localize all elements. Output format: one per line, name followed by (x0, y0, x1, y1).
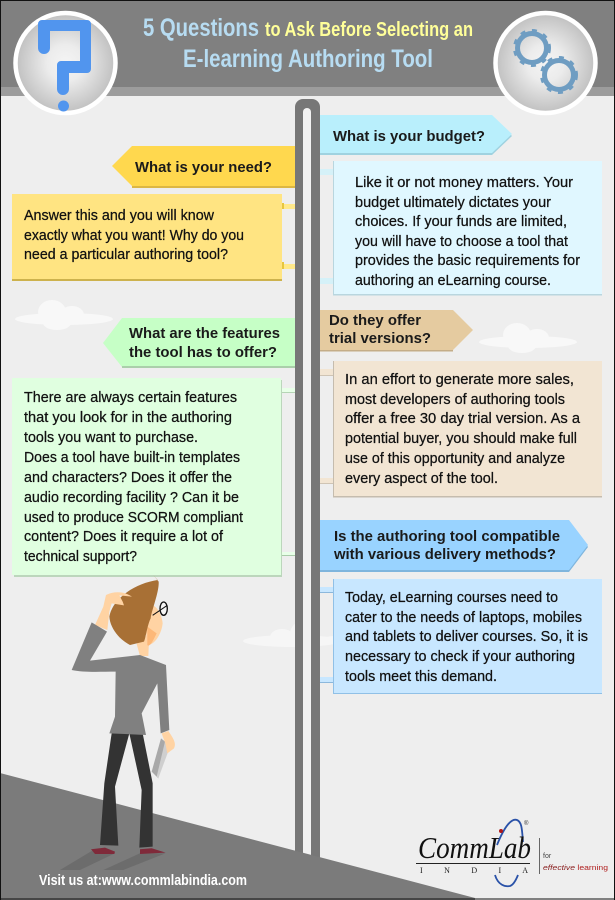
text box: trial versions: potential buyer, you should make full (345, 431, 577, 447)
text box: features: Does a tool have built-in templates (24, 450, 240, 466)
panel: features (12, 318, 295, 577)
logo: CommLab India: I N D I A (420, 866, 528, 875)
heading: need (112, 146, 295, 188)
connectors (282, 388, 295, 556)
connectors (320, 169, 334, 284)
heading: need: What is your need? (135, 160, 272, 176)
text box: trial versions: most developers of authoring tools (345, 392, 565, 408)
heading: delivery methods (320, 520, 588, 572)
text box: trial versions: use of this opportunity and analyze (345, 451, 565, 467)
logo: CommLab India (416, 820, 608, 886)
text box: features: tools you want to purchase. (24, 430, 198, 446)
text box: delivery methods: tools meet this demand. (345, 669, 497, 685)
heading: budget (320, 115, 512, 155)
website url: Visit us at:www.commlabindia.com (39, 872, 247, 889)
text box: delivery methods (333, 579, 602, 694)
text box: need: exactly what you want! Why do you (24, 228, 244, 244)
text box: budget (333, 161, 602, 296)
pole (295, 99, 320, 865)
text box: delivery methods: Today, eLearning courses need to (345, 590, 558, 606)
heading: features: the tool has to offer? (129, 345, 277, 361)
logo: CommLab India: effective learning (543, 863, 608, 872)
text box: need: need a particular authoring tool? (24, 247, 228, 263)
text box: features: used to produce SCORM compliant (24, 510, 243, 526)
ground (0, 773, 475, 900)
text box: features: There are always certain features (24, 390, 237, 406)
logo: CommLab India: ® (524, 820, 529, 827)
icon: gears (496, 13, 596, 113)
text box: delivery methods: necessary to check if your authoring (345, 649, 575, 665)
text box: trial versions: offer a free 30 day trial version. As a (345, 411, 581, 427)
cloud lower (243, 621, 347, 647)
panel: delivery methods (320, 520, 602, 694)
text box: trial versions (333, 361, 602, 498)
panel: trial versions (320, 310, 602, 498)
text box: features: content? Does it require a lot of (24, 529, 224, 545)
text box: features: that you look for in the authoring (24, 410, 232, 426)
text box: budget: Like it or not money matters. Your (355, 175, 573, 191)
cloud left (15, 300, 113, 330)
heading: trial versions: trial versions? (329, 331, 431, 347)
title: 5 Questions (143, 14, 259, 42)
icon: question mark (16, 13, 116, 113)
text box: features: technical support? (24, 549, 137, 565)
heading: features: What are the features (129, 326, 280, 342)
heading: delivery methods: Is the authoring tool compatible (334, 529, 560, 545)
connectors (320, 587, 333, 683)
heading: trial versions (320, 310, 473, 352)
heading: trial versions: Do they offer (329, 313, 421, 329)
text box: delivery methods: and tablets to deliver courses. So, it is (345, 629, 588, 645)
panel: budget (320, 115, 602, 296)
connectors (282, 203, 295, 269)
text box: features (12, 378, 282, 577)
logo: CommLab India: for (543, 853, 552, 860)
heading: budget: What is your budget? (333, 129, 485, 145)
text box: delivery methods: cater to the needs of laptops, mobiles (345, 610, 582, 626)
header band (0, 0, 615, 96)
heading: features (103, 318, 295, 368)
title: E-learning Authoring Tool (183, 45, 433, 73)
connectors (320, 369, 333, 484)
logo: CommLab India: CommLab (418, 830, 531, 865)
text box: budget: you will have to choose a tool that (355, 234, 568, 250)
cloud right (479, 323, 577, 353)
text box: budget: authoring an eLearning course. (355, 273, 551, 289)
heading: delivery methods: with various delivery methods? (333, 547, 556, 563)
text box: budget: budget ultimately dictates your (355, 195, 551, 211)
text box: need (12, 194, 282, 281)
panel: need (12, 146, 295, 281)
text box: features: and characters? Does it offer the (24, 470, 232, 486)
person illustration (60, 575, 175, 870)
text box: need: Answer this and you will know (24, 208, 215, 224)
title (143, 14, 473, 73)
title: to Ask Before Selecting an (265, 19, 473, 41)
text box: budget: provides the basic requirements for (355, 253, 580, 269)
text box: features: audio recording facility ? Can it be (24, 490, 239, 506)
text box: trial versions: every aspect of the tool. (345, 471, 498, 487)
text box: trial versions: In an effort to generate more sales, (345, 372, 574, 388)
text box: budget: choices. If your funds are limited, (355, 214, 567, 230)
